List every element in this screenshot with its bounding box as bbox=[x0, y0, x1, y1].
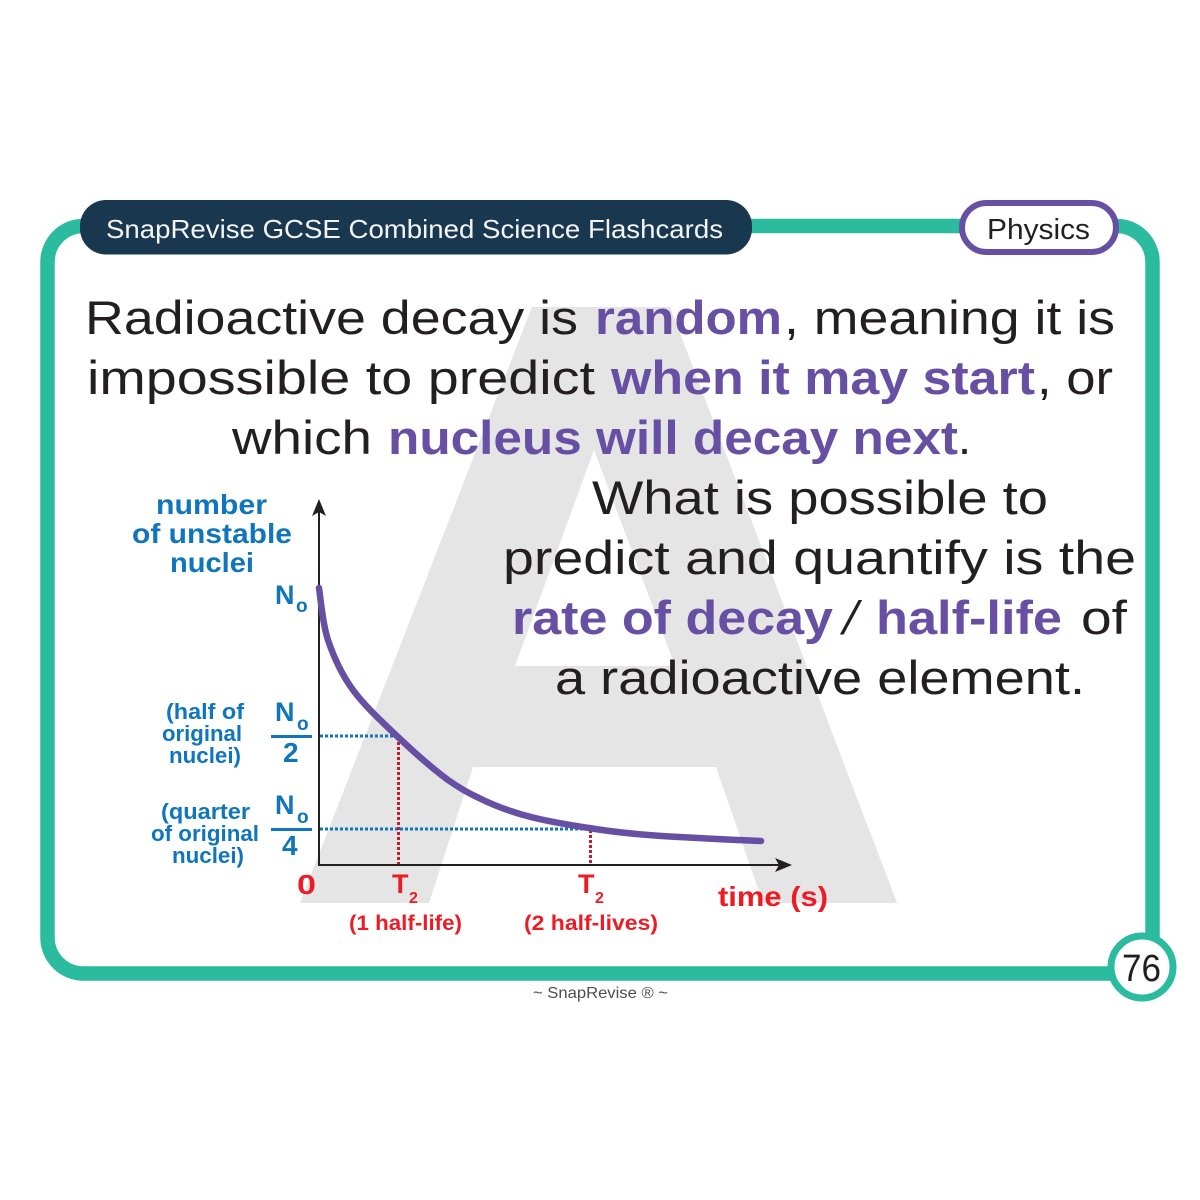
x axis with arrow bbox=[318, 858, 792, 872]
first half-life label: (1 half-life) bbox=[349, 912, 462, 935]
label: N0 over 4: o bbox=[297, 807, 309, 828]
note: quarter of original nuclei bbox=[151, 799, 259, 868]
first half-life label bbox=[349, 869, 462, 935]
x axis title: time (s) bbox=[718, 881, 828, 912]
label: N0: o bbox=[296, 596, 308, 617]
y axis title: nuclei bbox=[170, 547, 254, 578]
second half-life label: 2 bbox=[595, 890, 604, 907]
note: quarter of original nuclei: (quarter bbox=[161, 799, 250, 824]
note: quarter of original nuclei: of original bbox=[151, 821, 259, 846]
half-life guide lines bbox=[320, 736, 590, 864]
decay curve bbox=[319, 588, 761, 841]
main explanation text: random bbox=[595, 291, 782, 344]
label: N0 over 4: 4 bbox=[282, 830, 298, 861]
main explanation text: Radioactive decay is bbox=[85, 291, 578, 344]
first half-life label: 2 bbox=[409, 890, 418, 907]
main explanation text: a radioactive element. bbox=[555, 651, 1085, 704]
main explanation text: / bbox=[837, 593, 865, 645]
label: N0 over 2: N bbox=[275, 697, 294, 727]
main explanation text: What is possible to bbox=[592, 471, 1048, 524]
label: N0 over 4: N bbox=[275, 790, 294, 820]
background watermark letter A bbox=[300, 307, 897, 903]
main explanation text bbox=[85, 291, 1136, 704]
decay graph bbox=[132, 489, 828, 935]
main explanation text: half-life bbox=[876, 591, 1062, 644]
main explanation text: of bbox=[1081, 591, 1128, 644]
label: N0: N bbox=[275, 580, 294, 610]
origin label: 0 bbox=[297, 869, 316, 900]
main explanation text: which bbox=[231, 411, 372, 464]
main explanation text: impossible to predict bbox=[87, 351, 595, 404]
label: N0 bbox=[275, 580, 308, 617]
card frame bbox=[48, 226, 1152, 974]
label: N0 over 2 bbox=[271, 697, 312, 768]
note: half of original nuclei: original bbox=[162, 721, 242, 746]
main explanation text: , or bbox=[1037, 351, 1113, 404]
note: half of original nuclei bbox=[162, 699, 245, 768]
note: half of original nuclei: nuclei) bbox=[169, 743, 241, 768]
header pill: deck title bbox=[80, 200, 752, 254]
second half-life label bbox=[524, 869, 658, 935]
y axis title: number bbox=[156, 489, 267, 520]
main explanation text: rate of decay bbox=[512, 591, 833, 644]
second half-life label: (2 half-lives) bbox=[524, 912, 658, 935]
page number badge bbox=[1111, 936, 1173, 998]
y axis with arrow bbox=[312, 499, 326, 866]
subject pill: Physics: Physics bbox=[987, 214, 1090, 246]
header pill: deck title: SnapRevise GCSE Combined Science Flashcards bbox=[106, 214, 723, 244]
footer brand: ~ SnapRevise ® ~ bbox=[533, 985, 668, 1002]
main explanation text: . bbox=[958, 411, 971, 464]
note: quarter of original nuclei: nuclei) bbox=[172, 843, 244, 868]
label: N0 over 2: o bbox=[297, 714, 309, 735]
note: half of original nuclei: (half of bbox=[166, 699, 245, 724]
first half-life label: T bbox=[392, 869, 409, 899]
page number badge: 76 bbox=[1122, 948, 1161, 990]
y axis title: of unstable bbox=[132, 518, 292, 549]
second half-life label: T bbox=[578, 869, 595, 899]
label: N0 over 2: 2 bbox=[283, 737, 299, 768]
main explanation text: , meaning it is bbox=[784, 291, 1115, 344]
subject pill: Physics bbox=[962, 203, 1116, 252]
main explanation text: nucleus will decay next bbox=[388, 411, 958, 464]
main explanation text: when it may start bbox=[610, 351, 1035, 404]
label: N0 over 4 bbox=[271, 790, 312, 861]
y axis title bbox=[132, 489, 292, 578]
main explanation text: predict and quantify is the bbox=[503, 531, 1136, 584]
